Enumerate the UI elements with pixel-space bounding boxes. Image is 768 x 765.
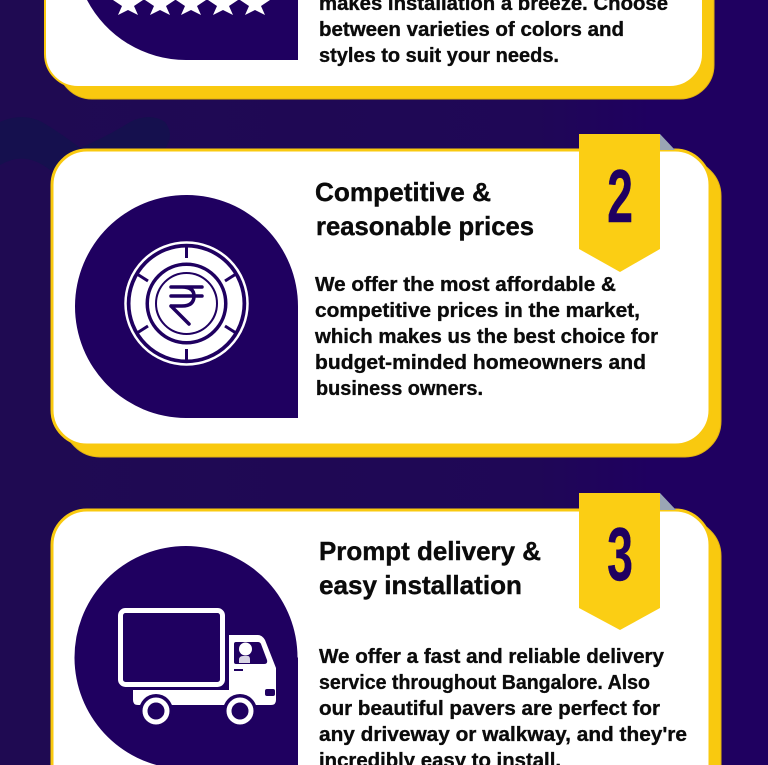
- card 3 heading: Prompt delivery &: [319, 536, 541, 566]
- card 3 text: our beautiful pavers are perfect for: [319, 697, 660, 720]
- card 2 heading: reasonable prices: [316, 211, 534, 241]
- card 1 face: [45, 0, 703, 87]
- card 1 icon badge: [87, 0, 298, 60]
- card 2 text: We offer the most affordable &: [315, 273, 616, 296]
- card 1 text: styles to suit your needs.: [319, 44, 559, 67]
- ribbon 3: [579, 493, 660, 630]
- card 2 heading: Competitive &: [315, 177, 491, 207]
- card 3 shadow: [64, 520, 721, 765]
- ribbon 2: [579, 134, 660, 272]
- card 2 face: [52, 150, 710, 445]
- number 2: 2: [607, 156, 633, 239]
- card 2 icon badge: [75, 195, 298, 418]
- card 3 icon badge: [75, 546, 298, 765]
- card 2 heading: [315, 177, 534, 241]
- card 3 text: [319, 645, 687, 765]
- card 3 text: We offer a fast and reliable delivery: [319, 645, 665, 668]
- card 2 shadow: [64, 160, 721, 457]
- card 3 face: [52, 510, 710, 765]
- card 2 text: budget-minded homeowners and: [315, 351, 646, 374]
- panel: card 3: [52, 493, 721, 765]
- card 2 text: business owners.: [316, 377, 483, 400]
- rupee symbol: [171, 287, 202, 324]
- card 3 text: service throughout Bangalore. Also: [319, 671, 650, 694]
- card 3 heading: [319, 536, 541, 600]
- card 1 text: [319, 0, 668, 67]
- icon: rupee coin: [126, 242, 248, 364]
- card 1 text: between varieties of colors and: [319, 18, 624, 41]
- panel: card 1: [45, 0, 714, 99]
- card 2 text: which makes us the best choice for: [314, 325, 658, 348]
- panel: card 2: [52, 134, 721, 457]
- card 1 shadow: [58, 0, 714, 99]
- icon: five stars: [113, 0, 270, 15]
- card 3 heading: easy installation: [319, 570, 522, 600]
- icon: delivery truck: [120, 610, 276, 728]
- number 3: 3: [607, 514, 633, 597]
- card 2 text: [314, 273, 658, 400]
- decorative blob: [0, 117, 170, 170]
- card 2 text: competitive prices in the market,: [315, 299, 640, 322]
- ribbon fold: [660, 134, 675, 150]
- ribbon fold: [660, 493, 676, 510]
- card 3 text: any driveway or walkway, and they're: [319, 723, 687, 746]
